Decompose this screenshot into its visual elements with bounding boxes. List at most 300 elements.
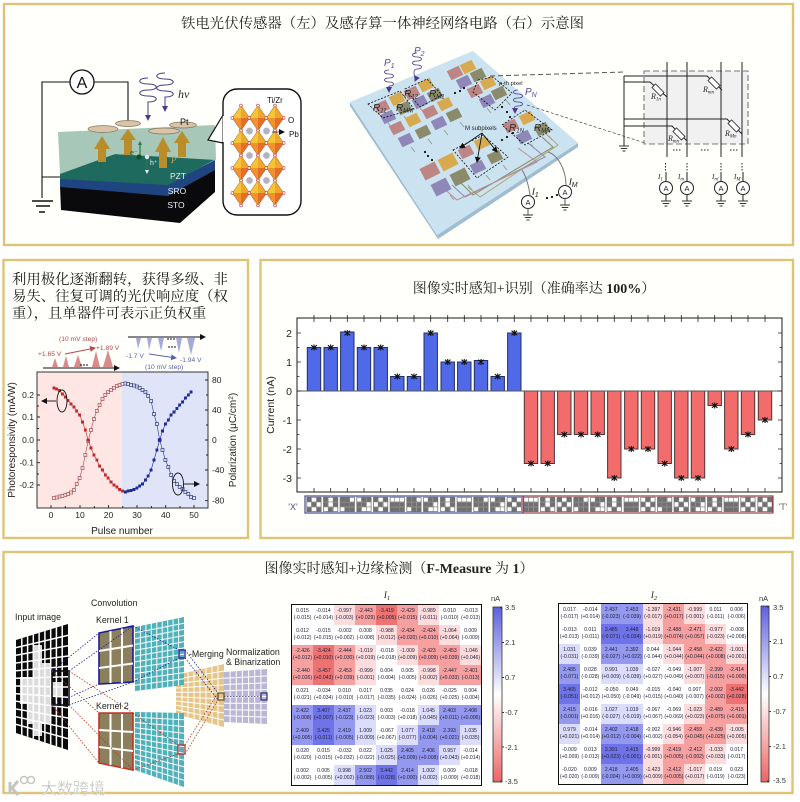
heatmap I2: 0.028 [584, 667, 597, 673]
pixel pins [388, 88, 552, 200]
heatmap I2: (-0.039) [623, 614, 641, 620]
heatmap I1: 0.008 [359, 628, 372, 634]
heatmap I1: (-0.010) [336, 695, 353, 701]
heatmap I1: (+0.032) [335, 755, 354, 761]
heatmap I2: 2.418 [605, 767, 618, 773]
highlight squares [178, 650, 267, 754]
heatmap I1: -0.999 [358, 668, 373, 674]
watermark [10, 776, 105, 798]
wires [624, 62, 742, 157]
normalized feature map [224, 669, 267, 724]
heatmap I1: (-0.026) [420, 695, 437, 701]
heatmap I2 [558, 603, 748, 785]
heatmap I1: -3.424 [316, 648, 331, 654]
heatmap I2: 0.979 [563, 727, 576, 733]
heatmap I2: 2.402 [605, 727, 618, 733]
colorbar I1 [491, 594, 518, 786]
heatmap I1: 0.026 [422, 688, 435, 694]
heatmap I2: -2.412 [688, 747, 702, 753]
y axis labels: -1 [283, 415, 292, 427]
heatmap I2: (+0.007) [685, 674, 704, 680]
heatmap I1: -3.419 [379, 608, 394, 614]
heatmap I1: (+0.005) [293, 735, 312, 741]
colorbar I2: -0.7 [773, 707, 786, 716]
heatmap I2: (-0.023) [728, 774, 745, 780]
heatmap I1: (+0.021) [440, 735, 459, 741]
negative pulse inset: -1.94 V [180, 357, 202, 364]
crystal inset: O [288, 116, 294, 125]
colorbar I1: 3.5 [505, 603, 515, 612]
heatmap I1: (-0.012) [294, 635, 311, 641]
heatmap I1: 2.405 [401, 748, 414, 754]
heatmap I1: -0.002 [337, 628, 352, 634]
heatmap I2: 0.049 [626, 687, 638, 693]
heatmap I1: 0.015 [296, 608, 309, 614]
heatmap I1: (+0.006) [461, 715, 480, 721]
heatmap I1: -0.067 [379, 728, 394, 734]
heatmap I2: -1.397 [646, 607, 660, 613]
feature map 2 [135, 712, 184, 787]
heatmap I1: (-0.005) [399, 675, 416, 681]
heatmap I2: -2.399 [708, 667, 723, 673]
heatmap I2: 3.391 [605, 747, 618, 753]
heatmap I2: 2.441 [605, 647, 618, 653]
heatmap I1: (-0.011) [315, 735, 332, 741]
heatmap I2: (-0.017) [561, 614, 578, 620]
heatmap I2: (+0.040) [664, 694, 683, 700]
panel: edge detection [4, 552, 792, 793]
negative pulse inset: -1.7 V [126, 353, 144, 360]
heatmap I2: (-0.054) [665, 734, 683, 740]
heatmap I2: (-0.044) [644, 654, 662, 660]
heatmap I1: (-0.023) [357, 715, 374, 721]
x axis title: Pulse number [91, 526, 154, 537]
heatmap I2: (+0.014) [581, 734, 600, 740]
labels P [384, 46, 538, 99]
label X: 'X' [288, 502, 298, 512]
heatmap I1: (+0.015) [314, 635, 333, 641]
heatmap I1: (+0.029) [356, 615, 375, 621]
ammeters I1 and IM: M [572, 182, 578, 189]
heatmap I1: (+0.039) [440, 655, 459, 661]
heatmap I1: -1.064 [442, 628, 457, 634]
resistor labels [650, 85, 737, 144]
heatmap I1: -0.025 [442, 688, 457, 694]
output ammeters: I [658, 173, 660, 181]
heatmap I1: 2.502 [359, 768, 372, 774]
heatmap I2: (-0.017) [644, 614, 662, 620]
blue bars for X [307, 332, 521, 391]
substrate [350, 102, 578, 239]
heatmap I2: -2.422 [708, 647, 723, 653]
heatmap I2: (+0.000) [727, 674, 746, 680]
heatmap I1: (-0.028) [378, 775, 395, 781]
heatmap I2: 1.031 [563, 647, 576, 653]
heatmap I2: (+0.008) [727, 634, 746, 640]
x axis labels [49, 510, 199, 520]
heatmap I2: (+0.014) [581, 614, 600, 620]
heatmap I2: (-0.006) [728, 614, 745, 620]
y axis labels: -3 [283, 473, 292, 485]
resistors [652, 77, 740, 140]
heatmap I2: (+0.005) [664, 774, 683, 780]
heatmap I2: -1.017 [688, 767, 702, 773]
heatmap I1: 0.022 [359, 748, 372, 754]
output ammeters: I [678, 173, 680, 181]
heatmap I1: (+0.043) [314, 675, 333, 681]
heatmap I2: 1.039 [626, 667, 638, 673]
heatmap I1: (+0.008) [419, 755, 438, 761]
heatmap I1: 0.998 [338, 768, 351, 774]
heatmap I1: 1.045 [422, 708, 435, 714]
heatmap I2: (-0.027) [602, 714, 620, 720]
heatmap I1: -0.018 [400, 708, 415, 714]
heatmap I1: -2.447 [442, 668, 457, 674]
heatmap I2: -0.015 [646, 687, 660, 693]
heatmap I2: (+0.005) [664, 754, 683, 760]
photoresponsivity and polarization chart [7, 372, 239, 537]
curve annotation left [42, 390, 67, 412]
heatmap I1: 2.393 [443, 728, 456, 734]
heatmap I2: -0.014 [583, 607, 598, 613]
heatmap I1: (+0.043) [440, 755, 459, 761]
colorbar I1: nA [491, 594, 500, 603]
subpixels purple [380, 75, 532, 196]
heatmap I1: 2.419 [338, 728, 351, 734]
heatmap I2: 0.023 [730, 767, 743, 773]
crossbar sensor array [350, 46, 578, 239]
heatmap I2: -1.007 [688, 667, 702, 673]
heatmap I1: -2.429 [400, 608, 415, 614]
heatmap I1: (-0.025) [378, 755, 395, 761]
resistance labels: MN [541, 128, 551, 134]
heatmap I2: (+0.045) [685, 734, 704, 740]
heatmap I2: (+0.002) [706, 694, 725, 700]
heatmap I2: (-0.023) [602, 614, 620, 620]
dashed pixel outlines [368, 77, 552, 178]
heatmap I2: 1.019 [626, 707, 638, 713]
heatmap I2: 2.415 [563, 707, 576, 713]
right axis title: 2 [228, 396, 235, 400]
heatmap I1: (+0.010) [314, 655, 333, 661]
crystal inset [208, 89, 301, 215]
diagram labels: & Binarization [226, 657, 280, 667]
heatmap I2: (+0.015) [643, 694, 663, 700]
resistance labels: R [404, 89, 411, 100]
heatmap I2: 0.011 [584, 627, 596, 633]
heatmap I2: -0.069 [667, 707, 681, 713]
heatmap I1: 2.406 [422, 748, 435, 754]
heatmap I2: 1.027 [605, 707, 618, 713]
heatmap I2: -2.488 [667, 627, 681, 633]
heatmap I2: (+0.001) [727, 714, 746, 720]
heatmap I1: (-0.004) [420, 735, 437, 741]
layer labels [167, 171, 187, 210]
resistor labels: R [651, 92, 656, 101]
heatmap I1: (-0.045) [420, 715, 437, 721]
description text: 利用极化逐渐翻转，获得多级、非 [12, 270, 228, 288]
heatmap I1: (+0.018) [398, 715, 417, 721]
colorbar I2: -3.5 [773, 776, 786, 785]
title: edge detection: 图像实时感知+边缘检测（F-Measure 为 1） [265, 560, 533, 577]
heatmap I1: -0.014 [316, 608, 331, 614]
x axis labels: 30 [132, 510, 142, 520]
heatmap I2: -0.008 [729, 627, 744, 633]
heatmap I2: (-0.028) [581, 674, 599, 680]
output ammeters: A [684, 184, 690, 193]
heatmap I1: -2.453 [442, 648, 457, 654]
heatmap I2: -0.012 [583, 687, 598, 693]
heatmap I2: (-0.011) [582, 634, 599, 640]
heatmap I2: (+0.008) [706, 654, 725, 660]
heatmap I2: 0.007 [688, 687, 701, 693]
labels P: P [384, 58, 391, 69]
heatmap I1: (+0.067) [377, 735, 396, 741]
heatmap I1: 1.077 [401, 728, 414, 734]
heatmap I2: (+0.075) [706, 714, 725, 720]
colorbar I1: -0.7 [505, 708, 518, 717]
light waves [140, 73, 173, 120]
ammeters I1 and IM [522, 152, 578, 220]
heatmap I2: -0.049 [667, 667, 681, 673]
diagram labels: -Merging [189, 649, 224, 659]
heatmap I1: (+0.013) [461, 615, 480, 621]
heatmap I1: -2.426 [295, 648, 310, 654]
charge carriers: e⁻ [130, 150, 138, 157]
heatmap I1: (-0.001) [357, 675, 374, 681]
heatmap I2: -0.020 [562, 767, 577, 773]
heatmap I2: (-0.001) [561, 714, 578, 720]
resistance labels: R [534, 123, 541, 134]
diagram labels: Input image [15, 612, 61, 622]
heatmap I2: -1.423 [646, 767, 660, 773]
output ammeters: I [734, 173, 736, 181]
ammeters I1 and IM: I [532, 187, 535, 198]
heatmap I1: (+0.009) [398, 655, 417, 661]
heatmap I2: -0.009 [562, 747, 577, 753]
colorbar I2: 0.7 [773, 672, 783, 681]
heatmap I2: (+0.057) [685, 634, 704, 640]
heatmap I1 [291, 604, 482, 786]
heatmap I2: -1.033 [708, 747, 723, 753]
heatmap I2: -2.431 [667, 607, 681, 613]
heatmap I1: (+0.026) [293, 675, 312, 681]
heatmap I1: (-0.024) [399, 695, 416, 701]
heatmap I1: 2.437 [338, 708, 351, 714]
x axis labels: 0 [49, 510, 54, 520]
heatmap I2: (+0.012) [581, 694, 600, 700]
labels P: P [414, 46, 421, 57]
resistor labels: R [703, 85, 708, 94]
resistance labels: R [373, 103, 380, 114]
heatmap I2: 0.006 [730, 607, 743, 613]
heatmap I1: (-0.008) [357, 635, 374, 641]
heatmap I1: (-0.002) [420, 675, 437, 681]
heatmap I1: (-0.022) [357, 755, 374, 761]
right axis labels: -40 [212, 465, 225, 475]
heatmap I1: 0.010 [443, 608, 456, 614]
heatmap I1: (-0.013) [462, 675, 479, 681]
heatmap I1: (+0.009) [398, 755, 417, 761]
heatmap I1: 1.002 [422, 768, 435, 774]
right axis labels: 80 [212, 375, 222, 385]
charge carriers: P [170, 155, 177, 165]
heatmap I1: (-0.004) [378, 675, 395, 681]
heatmap I2: -0.040 [667, 687, 681, 693]
heatmap I2: 2.453 [626, 607, 638, 613]
input patterns T [523, 496, 773, 513]
heatmap I1: (-0.002) [420, 775, 437, 781]
heatmap I1: -0.014 [463, 748, 478, 754]
heatmap I2: -1.005 [729, 727, 744, 733]
heatmap I1: (+0.030) [335, 655, 354, 661]
heatmap I1: (-0.088) [357, 775, 374, 781]
heatmap I2: (+0.067) [643, 714, 663, 720]
left axis labels: 0.2 [22, 390, 34, 400]
resistor labels: Mn [729, 134, 737, 140]
heatmap I2: 0.991 [605, 667, 618, 673]
heatmap I2: (-0.013) [581, 754, 599, 760]
heatmap I1: -1.019 [358, 648, 373, 654]
y axis title: Current (nA) [265, 376, 277, 434]
heatmap I2: 2.485 [563, 667, 576, 673]
heatmap I2: -2.002 [708, 687, 723, 693]
resistance labels: M1 [436, 94, 445, 100]
y axis labels: 0 [286, 386, 292, 398]
heatmap I2: (-0.009) [581, 774, 599, 780]
resistance labels: 11 [380, 108, 386, 114]
label I1: I [384, 590, 387, 600]
label T: 'T' [779, 502, 788, 512]
heatmap I2: -1.023 [688, 707, 702, 713]
heatmap I2: (+0.001) [727, 654, 746, 660]
heatmap I1: 1.009 [359, 728, 372, 734]
heatmap I2: -0.016 [583, 707, 598, 713]
dots [666, 150, 742, 170]
heatmap I1: 0.017 [359, 688, 372, 694]
heatmap I1: 2.409 [296, 728, 309, 734]
heatmap I1: (+0.012) [293, 655, 312, 661]
heatmap I2: (-0.039) [581, 654, 599, 660]
labels P: P [525, 87, 532, 98]
heatmap I2: (+0.023) [685, 714, 704, 720]
output ammeters: A [663, 184, 669, 193]
heatmap I2: -2.459 [688, 727, 702, 733]
bar chart [265, 315, 788, 513]
output ammeters: m' [714, 178, 720, 182]
circuit wire with ammeter [32, 70, 128, 212]
heatmap I2: (+0.017) [685, 774, 704, 780]
heatmap I1: 1.025 [380, 748, 393, 754]
heatmap I2: (-0.017) [728, 754, 745, 760]
heatmap I2: 0.013 [584, 747, 597, 753]
heatmap I1: (-0.005) [336, 735, 353, 741]
heatmap I1: 2.403 [443, 708, 456, 714]
heatmap I1: (+0.005) [377, 615, 396, 621]
heatmap I1: -0.989 [421, 608, 436, 614]
heatmap I1: 1.023 [359, 708, 372, 714]
heatmap I1: (+0.018) [461, 775, 480, 781]
left axis labels: 0.1 [22, 412, 34, 422]
heatmap I1: (-0.017) [357, 695, 374, 701]
heatmap I2: -0.067 [646, 707, 660, 713]
output ammeters: M [735, 178, 741, 182]
watermark: 大数跨境 [41, 779, 105, 798]
heatmap I2: -0.946 [667, 727, 681, 733]
heatmap I1: (-0.003) [336, 615, 353, 621]
heatmap I1: -0.988 [379, 628, 394, 634]
heatmap I1: -0.015 [316, 628, 331, 634]
heatmap I2: (-0.031) [561, 654, 578, 660]
output ammeters [657, 172, 750, 206]
heatmap I1: (+0.007) [314, 715, 333, 721]
heatmap I2: 2.418 [626, 727, 638, 733]
chart axes and ticks [297, 315, 782, 492]
heatmap I1: 0.004 [464, 688, 477, 694]
heatmap I2: (+0.033) [706, 754, 725, 760]
curve annotation right [172, 473, 199, 495]
heatmap I1: (-0.021) [294, 695, 311, 701]
left axis title: Photoresponsivity (mA/W) [7, 382, 18, 498]
right axis title: Polarization (μC/cm [228, 400, 239, 487]
heatmap I2: -3.442 [729, 687, 744, 693]
heatmap I1: (-0.015) [294, 615, 311, 621]
heatmap I1: -2.440 [295, 668, 310, 674]
filled responsivity curve, blue half [125, 392, 191, 492]
heatmap I2: (-0.071) [602, 634, 620, 640]
heatmap I1: 2.414 [401, 768, 414, 774]
heatmap I2: 0.039 [584, 647, 597, 653]
labels P: N [532, 92, 538, 99]
left axis labels [19, 390, 34, 490]
heatmap I2: (-0.051) [561, 694, 578, 700]
y axis labels: 1 [286, 357, 292, 369]
heatmap I2: -1.001 [729, 647, 744, 653]
left axis labels: -0.2 [19, 480, 34, 490]
resistance labels: 12 [411, 94, 419, 100]
resistor labels: R [668, 134, 673, 143]
kernel 2 [99, 713, 133, 770]
heatmap I2: -2.489 [708, 707, 723, 713]
heatmap I1: 0.002 [296, 768, 309, 774]
resistance labels [373, 89, 551, 134]
heatmap I1: -0.018 [379, 648, 394, 654]
description text: 易失、往复可调的光伏响应度（权 [12, 287, 228, 305]
ammeters I1 and IM: I [569, 177, 572, 188]
resistance labels: MM [403, 108, 413, 114]
input image [16, 620, 68, 755]
colorbar I2: 2.1 [773, 637, 783, 646]
selection box on input [52, 671, 69, 705]
heatmap I2: (+0.021) [560, 734, 579, 740]
description text: 重），且单器件可表示正负权重 [12, 304, 206, 322]
title: recognition: 图像实时感知+识别（准确率达 100%） [413, 280, 655, 297]
heatmap I2: (-0.049) [623, 694, 641, 700]
label hv: hν [178, 87, 190, 101]
heatmap I2: (-0.001) [686, 614, 704, 620]
negative pulse inset: (10 mV step) [145, 364, 183, 371]
heatmap I1: -2.443 [358, 608, 373, 614]
heatmap I2: 2.405 [626, 767, 638, 773]
heatmap I1: (-0.011) [420, 615, 437, 621]
heatmap I1: (-0.010) [441, 615, 458, 621]
left axis labels: 0.0 [22, 435, 34, 445]
right axis labels: 0 [212, 435, 217, 445]
heatmap I1: (+0.002) [335, 775, 354, 781]
left axis labels: -0.1 [19, 458, 34, 468]
heatmap I1: (-0.012) [378, 635, 395, 641]
heatmap I2: 2.392 [626, 647, 638, 653]
